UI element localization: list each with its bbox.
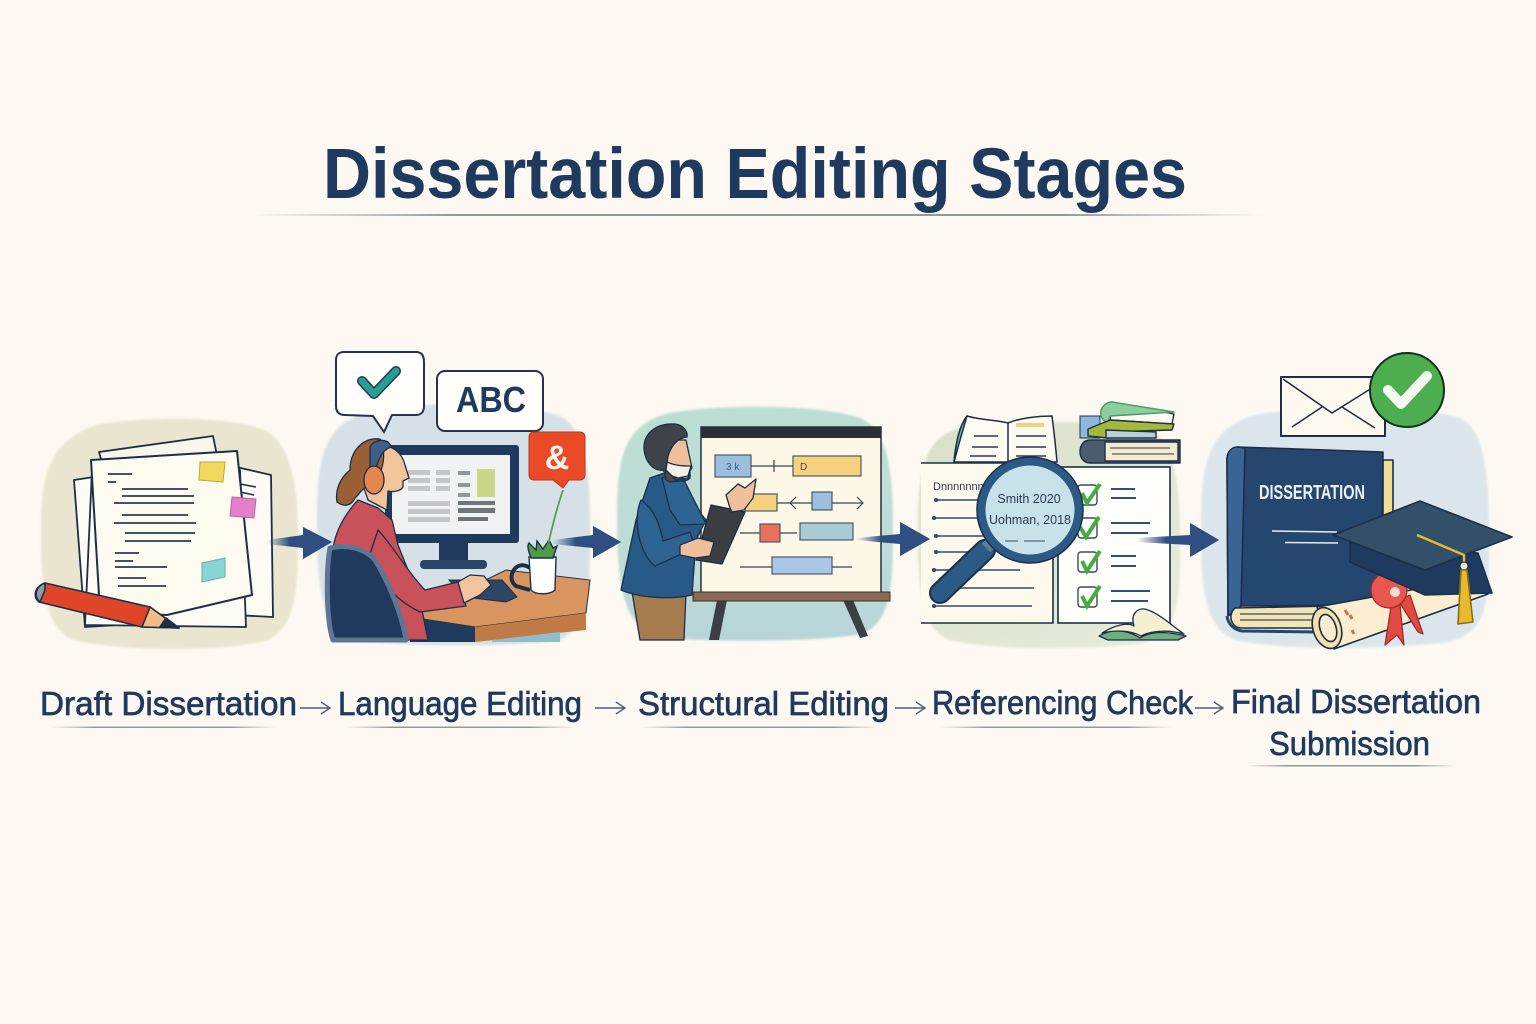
icon: red ampersand tag: & (545, 439, 569, 477)
label: referencing check: Referencing Check (932, 684, 1193, 721)
panel: draft dissertation (35, 419, 298, 649)
thin arrow 2 (595, 702, 625, 714)
presenter (621, 424, 756, 640)
magnifying glass: Smith 2020 (997, 492, 1061, 506)
label: language editing: Language Editing (338, 685, 582, 722)
magnifying glass (940, 457, 1083, 593)
icon: red ampersand tag (529, 432, 585, 545)
coffee mug with plant (512, 540, 557, 594)
label: final dissertation submission: Submission (1269, 725, 1430, 762)
reference document (921, 463, 1053, 623)
speech bubble: ABC (437, 371, 543, 431)
diploma scroll (1307, 578, 1488, 652)
arrow: draft to language (267, 527, 332, 559)
speech bubble: check (336, 352, 424, 432)
envelope (1281, 377, 1385, 436)
arrow: structural to referencing (856, 522, 930, 556)
whiteboard with flowchart: 3 k (726, 462, 740, 473)
tablet keyboard (449, 580, 517, 602)
speech bubble: ABC: ABC (456, 379, 526, 420)
office chair (327, 546, 406, 640)
label: structural editing: Structural Editing (638, 685, 889, 722)
desk (410, 570, 590, 642)
stack of books (1080, 402, 1180, 463)
panel: final submission (1201, 353, 1512, 652)
panel: structural editing (617, 407, 893, 641)
open book (954, 416, 1057, 462)
whiteboard with flowchart: D (800, 462, 807, 473)
magnifying glass: Uohman, 2018 (989, 513, 1071, 527)
arrow: language to structural (552, 526, 621, 558)
thin arrow 4 (1195, 702, 1223, 714)
title: Dissertation Editing Stages (323, 135, 1187, 214)
ribbon seal (1371, 572, 1423, 645)
icon: green check badge (1370, 353, 1444, 427)
whiteboard with flowchart (693, 427, 890, 640)
graduation cap (1333, 501, 1512, 624)
label: final dissertation submission: Final Dissertation (1231, 683, 1481, 720)
label: draft dissertation: Draft Dissertation (40, 685, 297, 722)
label: final dissertation submission (1231, 683, 1481, 766)
person (333, 439, 491, 640)
panel: language editing (317, 352, 590, 645)
panel: referencing check: Dnnnnnnnnn (933, 481, 996, 493)
icon: stack of paper sheets (74, 436, 273, 627)
flowchart boxes (715, 455, 863, 574)
book: dissertation (1227, 447, 1393, 632)
sticky notes (199, 462, 256, 582)
thin arrow 3 (895, 702, 925, 714)
main page (91, 451, 252, 615)
book: dissertation: DISSERTATION (1259, 482, 1365, 504)
panel: referencing check (918, 402, 1186, 648)
small open book (1099, 609, 1186, 640)
checklist document (1058, 467, 1170, 623)
icon: pencil (35, 583, 179, 628)
arrow: referencing to final (1137, 523, 1219, 557)
monitor (385, 445, 519, 569)
thin arrow 1 (300, 702, 330, 714)
